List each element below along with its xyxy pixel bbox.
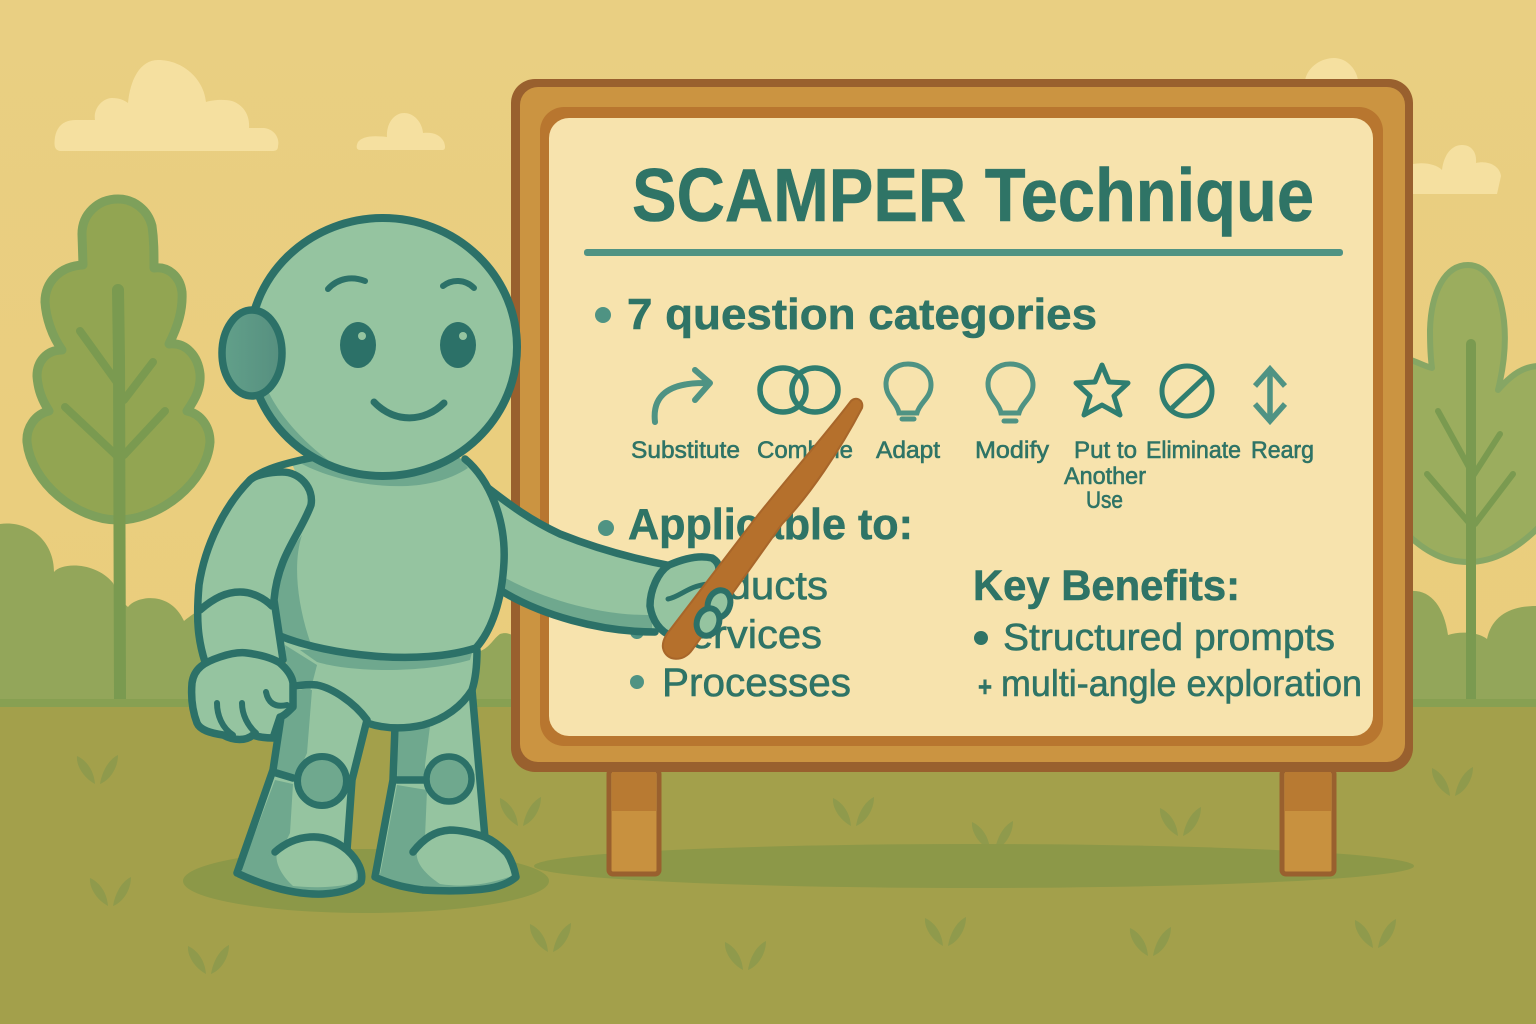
sky background — [0, 0, 1536, 705]
robot right hand — [650, 557, 719, 636]
list: benefits: multi-angle exploration — [1001, 663, 1362, 704]
robot left arm — [197, 472, 311, 662]
icon labels: Rearg — [1251, 437, 1314, 464]
icon: eliminate — [1162, 366, 1212, 416]
title: SCAMPER Technique — [632, 153, 1314, 237]
right tree trunk and branches — [1427, 344, 1513, 700]
robot foot: right — [375, 830, 516, 891]
icon: substitute arrow — [655, 370, 710, 422]
shadow: board — [534, 844, 1414, 888]
robot head — [222, 218, 517, 490]
bushes: middle — [470, 633, 514, 705]
heading: key benefits: Key Benefits: — [973, 562, 1240, 610]
bullet heading: 7 question categories: 7 question categories — [627, 290, 1097, 339]
pointer stick — [663, 399, 862, 659]
bushes: right — [1410, 591, 1536, 705]
icon labels: Modify — [975, 437, 1049, 464]
icon labels: Use — [1086, 487, 1123, 514]
heading: applicable to: Applicable to: — [628, 500, 913, 549]
icon labels: Eliminate — [1146, 437, 1241, 464]
list: applicable items: Processes — [662, 661, 851, 705]
icon: combine rings — [760, 368, 838, 412]
cloud: large left — [55, 60, 278, 151]
robot character — [192, 218, 862, 894]
robot face lines — [328, 278, 474, 289]
board frame — [511, 79, 1413, 772]
robot smile — [374, 402, 444, 418]
title underline — [584, 249, 1343, 256]
robot ear — [222, 310, 282, 396]
list: benefits: + — [978, 671, 992, 702]
icon labels: Another — [1064, 463, 1146, 490]
list: benefits — [974, 617, 1362, 704]
list: applicable items — [630, 564, 851, 705]
shadow: robot — [183, 849, 549, 913]
robot torso — [250, 455, 504, 657]
cloud: small left — [357, 113, 445, 150]
icon: modify bulb — [988, 364, 1033, 421]
ground — [0, 699, 1536, 1024]
robot left leg — [237, 672, 372, 887]
icon labels: Substitute — [631, 437, 740, 464]
tree trunk and branches — [65, 290, 165, 700]
board paper — [549, 118, 1373, 736]
robot knee: left — [298, 756, 346, 806]
robot knee: right — [426, 756, 472, 802]
tree: right — [1405, 265, 1536, 700]
list: applicable items: Products — [662, 564, 828, 608]
robot eyes — [340, 322, 476, 368]
icon labels: Put to — [1074, 437, 1137, 464]
icon labels — [631, 437, 1314, 514]
board post: right — [1282, 770, 1334, 874]
board post: left — [609, 770, 659, 874]
cloud: right — [1413, 145, 1501, 194]
robot foot: left — [237, 837, 362, 894]
cloud: behind board — [1305, 58, 1358, 80]
robot right leg — [375, 690, 485, 883]
icon labels: Adapt — [876, 437, 940, 464]
list: applicable items: Services — [662, 613, 822, 657]
list: benefits: Structured prompts — [1003, 617, 1335, 659]
icon: adapt bulb — [886, 364, 931, 419]
bushes: left — [0, 523, 205, 705]
robot pelvis — [283, 640, 477, 728]
grass tufts — [77, 755, 1473, 974]
robot left hand — [192, 653, 293, 740]
tree: left — [27, 199, 210, 700]
robot fingers — [693, 587, 734, 639]
robot right arm — [488, 488, 672, 632]
icon: star — [1076, 365, 1128, 415]
icon: rearrange arrow — [1255, 369, 1285, 421]
icon labels: Combine — [757, 437, 853, 464]
